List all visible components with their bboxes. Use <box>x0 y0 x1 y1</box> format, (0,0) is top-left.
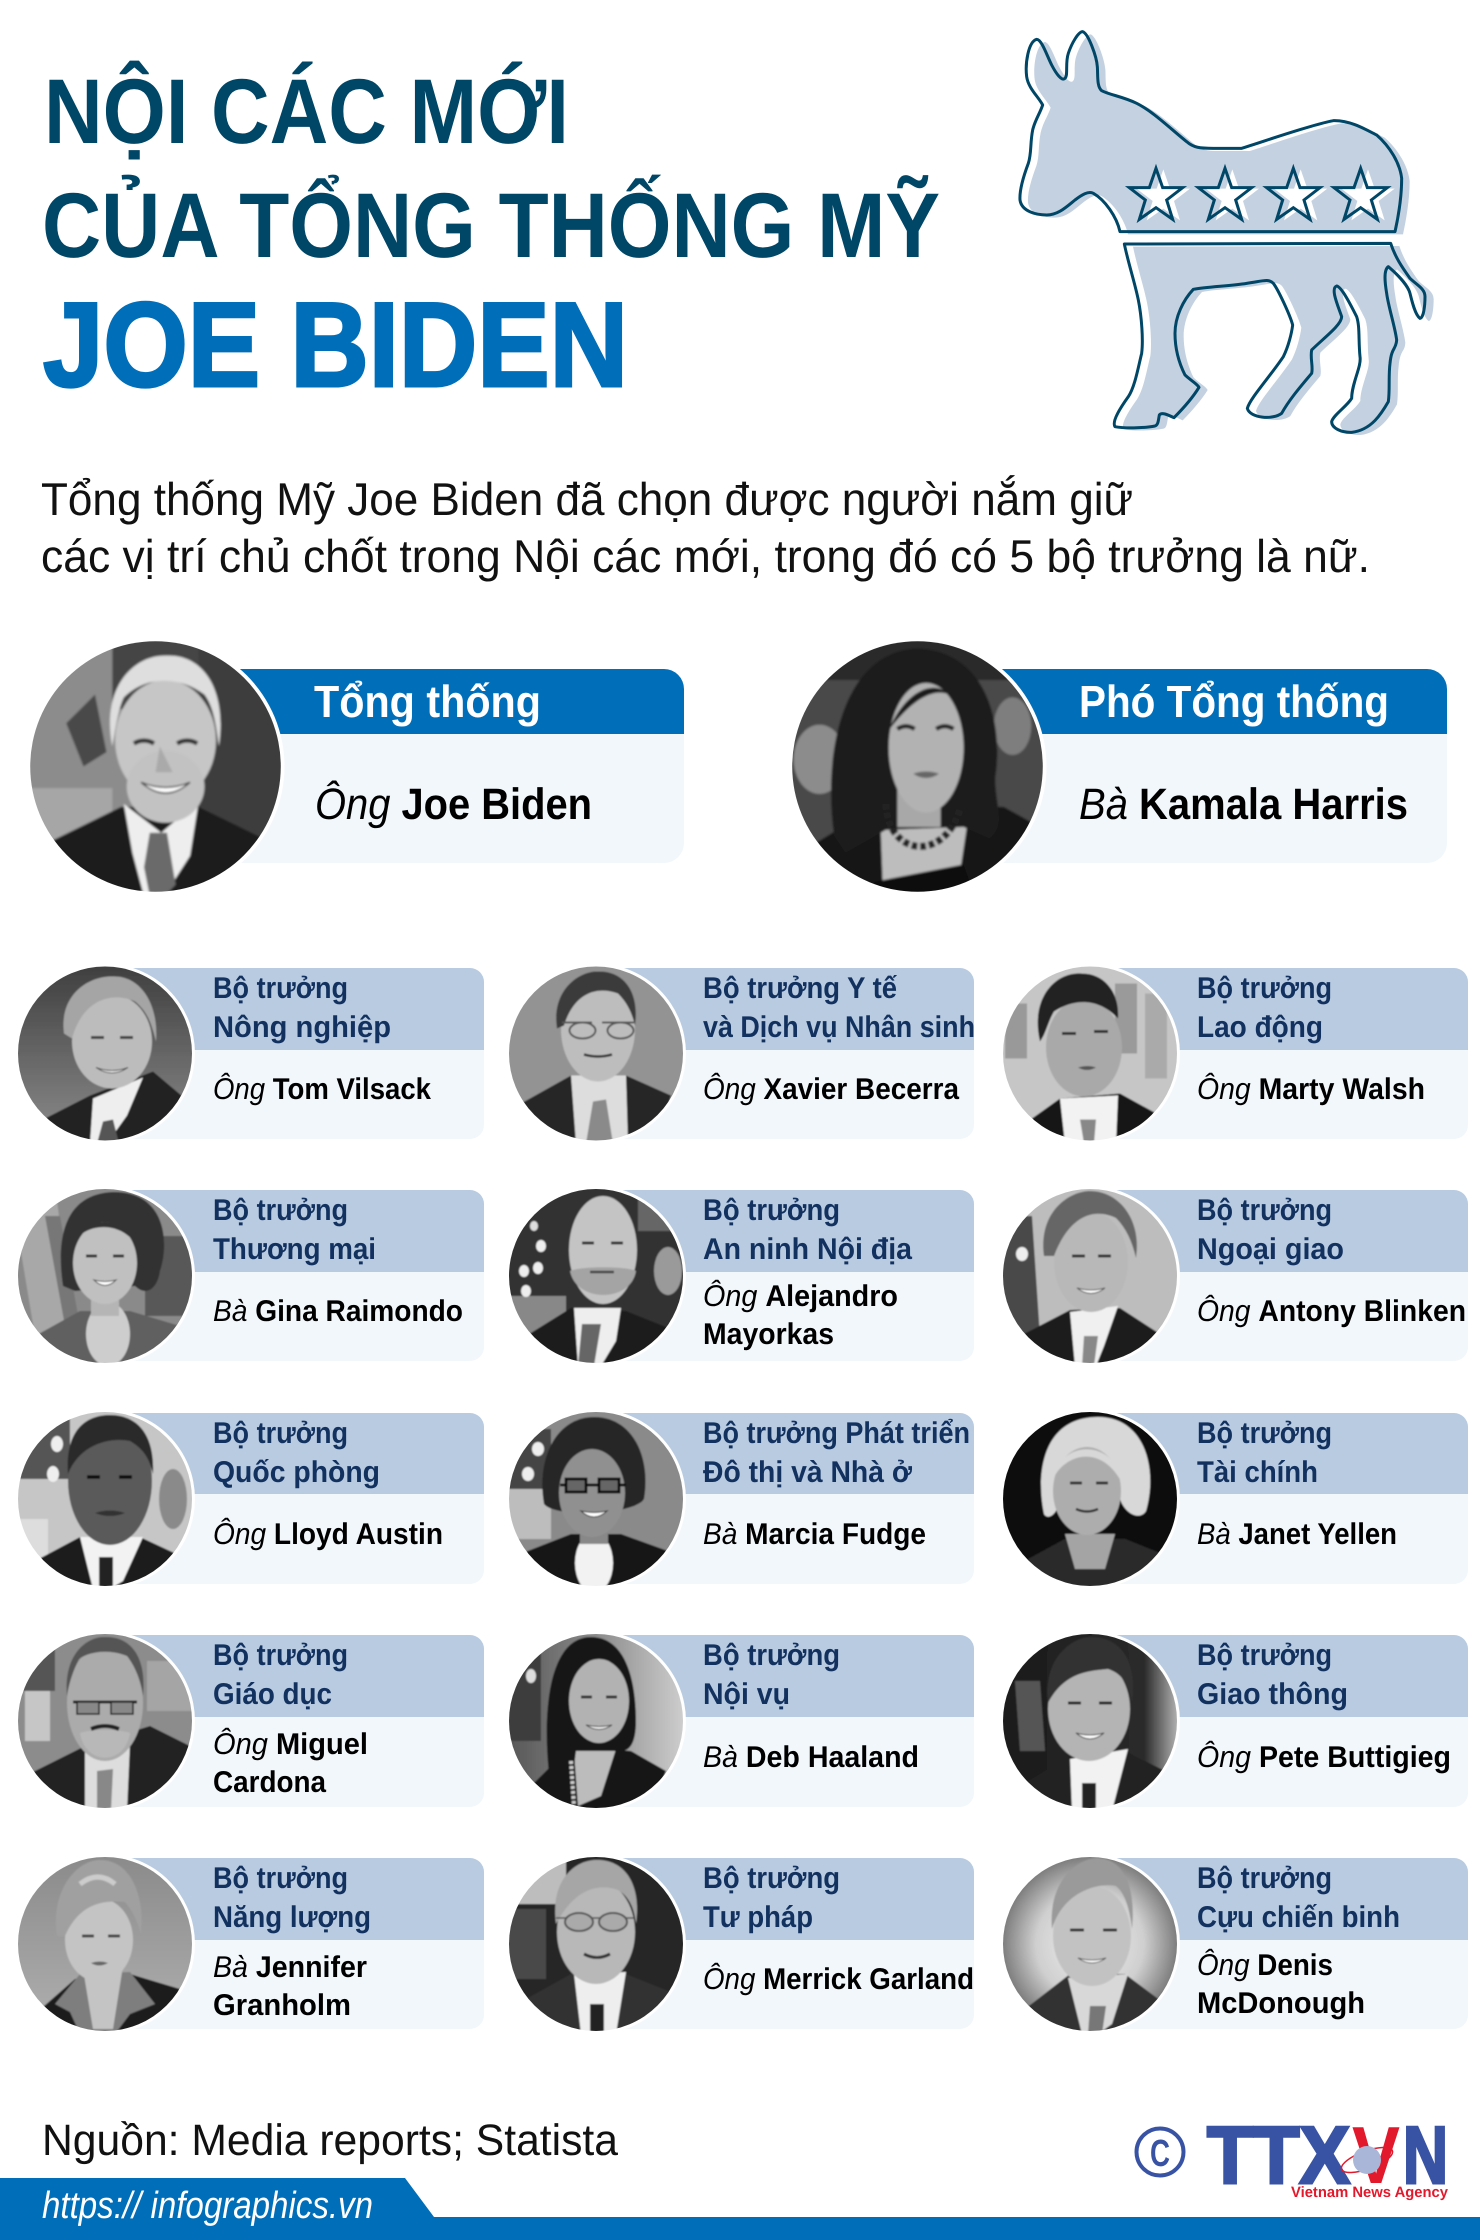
role <box>1197 972 1332 1044</box>
role <box>213 1639 348 1711</box>
label: Tổng thống: Tổng thống <box>314 676 541 727</box>
card: Labor, Marty Walsh <box>1000 964 1468 1144</box>
icon: democratic donkey with four stars <box>1020 32 1434 435</box>
logo: TTXVN Vietnam News Agency: TTX <box>1207 2111 1350 2201</box>
intro text: Tổng thống Mỹ Joe Biden đã chọn được người nắm giữ <box>41 473 1133 525</box>
role: Bộ trưởng <box>1197 1194 1332 1227</box>
name: Ông Alejandro <box>703 1279 898 1313</box>
role: Tư pháp <box>703 1901 813 1934</box>
portrait: Tom Vilsack <box>15 964 195 1144</box>
portrait: Janet Yellen <box>1000 1409 1180 1589</box>
portrait: Xavier Becerra <box>506 964 686 1144</box>
portrait: Miguel Cardona <box>15 1631 195 1811</box>
role: Năng lượng <box>213 1901 371 1934</box>
portrait: Marcia Fudge <box>506 1409 686 1593</box>
portrait: Antony Blinken <box>1000 1186 1180 1366</box>
name <box>213 1951 367 2022</box>
card: Treasury, Janet Yellen <box>1000 1409 1468 1589</box>
title: NỘI CÁC MỚI <box>44 60 569 163</box>
role <box>703 1417 970 1489</box>
intro text: các vị trí chủ chốt trong Nội các mới, trong đó có 5 bộ trưởng là nữ. <box>41 530 1370 582</box>
title <box>42 60 940 412</box>
card: Justice, Merrick Garland <box>506 1854 974 2034</box>
logo: TTXVN Vietnam News Agency: Vietnam News Agency <box>1291 2184 1449 2201</box>
role <box>703 972 975 1044</box>
name: Bà Deb Haaland <box>703 1741 919 1774</box>
card: Transportation, Pete Buttigieg <box>1000 1631 1468 1811</box>
source line: Nguồn: Media reports; Statista <box>42 2116 619 2165</box>
role: Lao động <box>1197 1011 1323 1044</box>
card: President Joe Biden <box>26 637 684 896</box>
role <box>703 1639 840 1711</box>
role: Bộ trưởng <box>213 1194 348 1227</box>
card: Veterans Affairs, Denis McDonough <box>1000 1854 1468 2034</box>
name: McDonough <box>1197 1987 1365 2020</box>
role: Bộ trưởng Y tế <box>703 972 897 1005</box>
logo: TTXVN Vietnam News Agency: N <box>1403 2111 1448 2201</box>
role: Giáo dục <box>213 1678 332 1711</box>
title: CỦA TỔNG THỐNG MỸ <box>42 174 940 277</box>
role: Bộ trưởng <box>1197 1639 1332 1672</box>
card: Agriculture, Tom Vilsack <box>15 964 484 1144</box>
logo: TTXVN Vietnam News Agency: V <box>1352 2111 1400 2201</box>
role: Bộ trưởng <box>703 1194 840 1227</box>
role <box>1197 1194 1344 1266</box>
role: Ngoại giao <box>1197 1233 1344 1266</box>
role <box>213 1194 376 1266</box>
card: Interior, Deb Haaland <box>506 1631 974 1811</box>
role: Bộ trưởng <box>213 1639 348 1672</box>
card: Commerce, Gina Raimondo <box>15 1186 484 1366</box>
name: Granholm <box>213 1989 351 2022</box>
name: Ông Denis <box>1197 1948 1333 1982</box>
name: Bà Jennifer <box>213 1951 367 1984</box>
name: Bà Janet Yellen <box>1197 1518 1397 1551</box>
card: Housing, Marcia Fudge <box>506 1409 974 1593</box>
logo: TTXVN Vietnam News Agency: C <box>1150 2133 1170 2175</box>
role: Bộ trưởng <box>703 1862 840 1895</box>
role: Quốc phòng <box>213 1456 380 1489</box>
name: Ông Lloyd Austin <box>213 1517 443 1551</box>
role: và Dịch vụ Nhân sinh <box>703 1011 975 1044</box>
role <box>1197 1639 1348 1711</box>
name: Ông Xavier Becerra <box>703 1072 959 1106</box>
title: JOE BIDEN <box>43 278 628 412</box>
name: Cardona <box>213 1766 326 1799</box>
portrait: Kamala Harris <box>788 637 1047 896</box>
role <box>1197 1417 1332 1489</box>
role: Bộ trưởng <box>213 1417 348 1450</box>
card: Homeland Security, Alejandro Mayorkas <box>506 1186 974 1366</box>
name: Bà Marcia Fudge <box>703 1518 926 1551</box>
role: Cựu chiến binh <box>1197 1901 1400 1934</box>
portrait: Gina Raimondo <box>15 1186 195 1366</box>
portrait: Deb Haaland <box>506 1631 686 1811</box>
card: Defense, Lloyd Austin <box>15 1409 484 1589</box>
name: Ông Miguel <box>213 1727 368 1761</box>
name: Bà Gina Raimondo <box>213 1295 463 1328</box>
role: Giao thông <box>1197 1678 1348 1711</box>
role: Bộ trưởng <box>1197 972 1332 1005</box>
role: Đô thị và Nhà ở <box>703 1456 913 1489</box>
name <box>213 1727 368 1799</box>
role: Thương mại <box>213 1233 376 1266</box>
role <box>1197 1862 1400 1934</box>
name: Ông Merrick Garland <box>703 1962 974 1996</box>
label: Phó Tổng thống: Phó Tổng thống <box>1079 676 1389 727</box>
name <box>1197 1948 1365 2020</box>
portrait: Joe Biden <box>26 637 285 896</box>
role <box>213 1862 371 1934</box>
role: Bộ trưởng <box>703 1639 840 1672</box>
name: Ông Tom Vilsack <box>213 1072 431 1106</box>
portrait: Marty Walsh <box>1000 964 1180 1144</box>
footer bar with URL <box>0 2178 1480 2240</box>
intro text <box>41 473 1370 582</box>
portrait: Lloyd Austin <box>15 1409 195 1589</box>
card: Energy, Jennifer Granholm <box>15 1854 484 2034</box>
card: Foreign Affairs, Antony Blinken <box>1000 1186 1468 1366</box>
portrait: Pete Buttigieg <box>1000 1631 1180 1811</box>
portrait: Merrick Garland <box>506 1854 686 2034</box>
footer bar with URL: https:// infographics.vn <box>42 2185 373 2227</box>
role: Nội vụ <box>703 1678 790 1711</box>
role: An ninh Nội địa <box>703 1233 912 1266</box>
name: Ông Marty Walsh <box>1197 1072 1425 1106</box>
name: Mayorkas <box>703 1318 834 1351</box>
role <box>703 1862 840 1934</box>
role: Bộ trưởng <box>1197 1862 1332 1895</box>
card: Education, Miguel Cardona <box>15 1631 484 1811</box>
card: Health, Xavier Becerra <box>506 964 975 1144</box>
logo: TTXVN Vietnam News Agency <box>1136 2111 1449 2201</box>
role: Bộ trưởng <box>213 972 348 1005</box>
role: Nông nghiệp <box>213 1011 391 1044</box>
role: Bộ trưởng <box>1197 1417 1332 1450</box>
role <box>703 1194 912 1266</box>
role <box>213 972 391 1044</box>
name <box>703 1279 898 1351</box>
role: Bộ trưởng Phát triển <box>703 1417 970 1450</box>
portrait: Alejandro Mayorkas <box>506 1186 688 1366</box>
name: Kamala Harris: Bà Kamala Harris <box>1079 780 1408 829</box>
name: Ông Antony Blinken <box>1197 1294 1466 1328</box>
portrait: Jennifer Granholm <box>15 1854 195 2034</box>
role <box>213 1417 380 1489</box>
name: Joe Biden: Ông Joe Biden <box>315 780 592 829</box>
role: Tài chính <box>1197 1456 1318 1489</box>
name: Ông Pete Buttigieg <box>1197 1740 1451 1774</box>
portrait: Denis McDonough <box>1000 1854 1180 2034</box>
card: Vice President Kamala Harris <box>788 637 1447 896</box>
role: Bộ trưởng <box>213 1862 348 1895</box>
